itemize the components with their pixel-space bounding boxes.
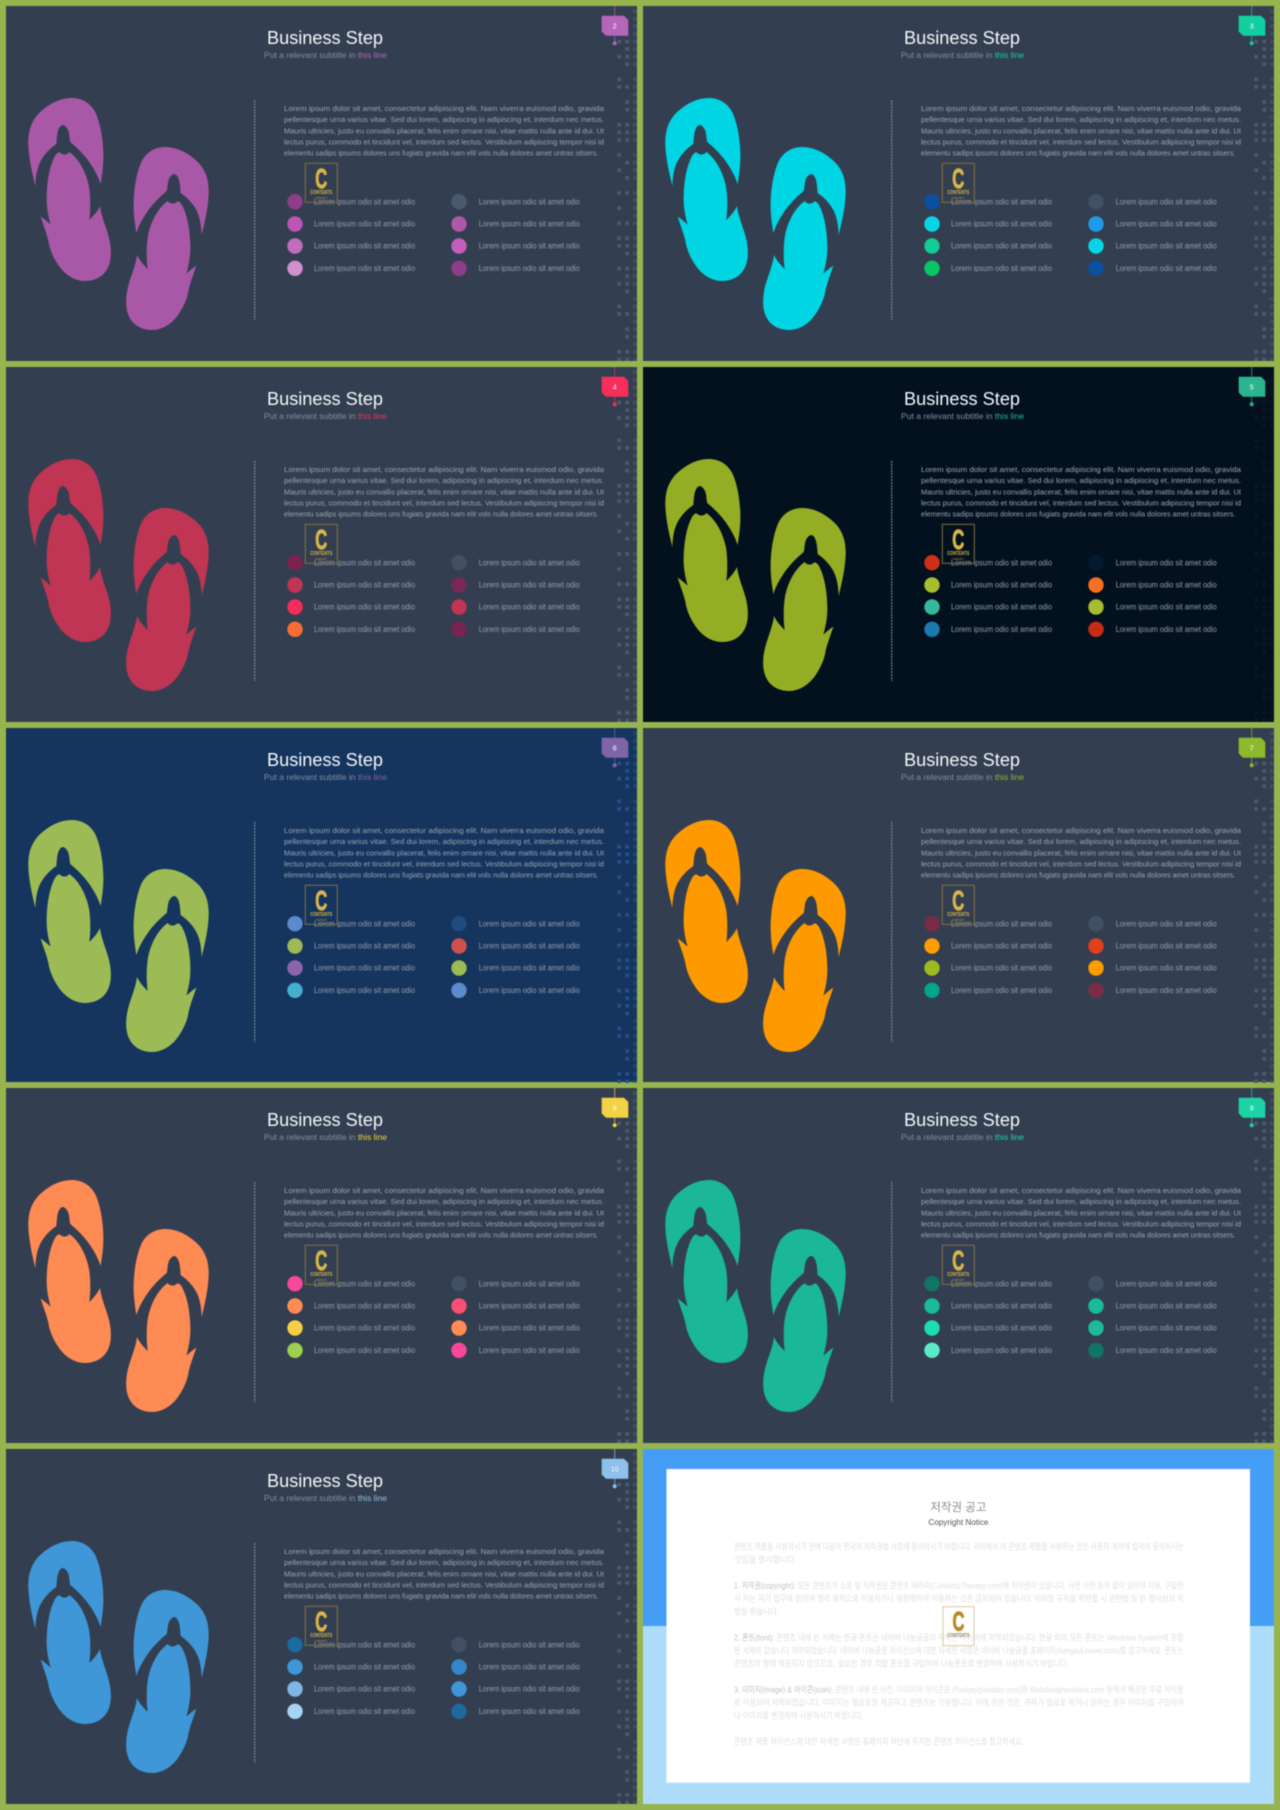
notice section 1: 사 자는 자기 업무에 한하여 영리 목적으로 이용하거나 재판매하여 이용하는 것은 금지되어 있습니다. 이러한 규칙을 위반할 시 관련법 및 민·형사상의 처 [734, 1592, 1184, 1603]
text block: paragraph: Mauris ultricies, justo eu convallis placerat, felis enim ornare nisi, vitae mattis nulla ante id dui. Ut [921, 848, 1241, 857]
legend list: Lorem ipsum odio sit amet odio [314, 242, 416, 251]
icon: flip flops [28, 1541, 209, 1773]
legend list: Lorem ipsum odio sit amet odio [314, 625, 416, 634]
page tab: 3 [1250, 24, 1254, 30]
panel: slide 7 orange [643, 728, 1274, 1083]
legend list: Lorem ipsum odio sit amet odio [951, 1279, 1053, 1288]
text block: paragraph: Mauris ultricies, justo eu convallis placerat, felis enim ornare nisi, vitae mattis nulla ante id dui. Ut [921, 487, 1241, 496]
legend list: Lorem ipsum odio sit amet odio [951, 197, 1053, 206]
logo: C [315, 1606, 327, 1637]
notice section 3: 로 이용되어 저작되었습니다. 이미지는 필요로한 제공하고 콘텐츠는 기본합니다. 이에 관한 것은, 귀하가 필요로 하거나 원하는 경우 이미지를 구입하여 [734, 1696, 1184, 1707]
legend list: Lorem ipsum odio sit amet odio [314, 1707, 416, 1716]
icon: flip flops [665, 98, 846, 330]
panel: slide 4 crimson [6, 367, 637, 722]
notice section 2: 2. 폰트(font): 콘텐츠 내에 쓴 서체는 한글 폰트는 네이버 나눔글꼴의 저작권 네이버에 저작되었습니다. 한글 외의 모든 폰트는 Windows System에 포함 [734, 1631, 1184, 1642]
logo: CONTENTS [310, 190, 333, 196]
legend list [287, 1637, 580, 1719]
text block: paragraph: Mauris ultricies, justo eu convallis placerat, felis enim ornare nisi, vitae mattis nulla ante id dui. Ut [921, 1208, 1241, 1217]
legend list: Lorem ipsum odio sit amet odio [951, 1346, 1053, 1355]
logo [305, 1606, 337, 1645]
logo: CONTENTS [310, 551, 333, 557]
panel: slide 6 green on blue [6, 728, 637, 1083]
logo: C [315, 885, 327, 916]
text block: paragraph [921, 1186, 1242, 1240]
legend list: Lorem ipsum odio sit amet odio [479, 558, 580, 567]
subtitle: Put a relevant subtitle in this line [901, 412, 1024, 421]
legend list: Lorem ipsum odio sit amet odio [314, 986, 416, 995]
text block: paragraph: elementu sadips ipsums dolores uns fugiats gravida nam elit vols nulla dolores amet untras sitsers. [284, 510, 598, 518]
notice section 2 [734, 1631, 1184, 1668]
legend list: Lorem ipsum odio sit amet odio [1116, 942, 1217, 951]
logo: THERAPY [315, 196, 327, 200]
text block: paragraph [284, 826, 605, 880]
legend list: Lorem ipsum odio sit amet odio [951, 1302, 1053, 1311]
legend list: Lorem ipsum odio sit amet odio [479, 1707, 580, 1716]
legend list: Lorem ipsum odio sit amet odio [479, 986, 580, 995]
legend list: Lorem ipsum odio sit amet odio [951, 986, 1053, 995]
page tab: 5 [1250, 384, 1254, 392]
legend list: Lorem ipsum odio sit amet odio [951, 264, 1053, 273]
legend list: Lorem ipsum odio sit amet odio [479, 1640, 580, 1649]
notice intro: 것임을 명시합니다. [734, 1553, 797, 1564]
icon: flip flops [28, 98, 209, 330]
legend list: Lorem ipsum odio sit amet odio [314, 220, 416, 229]
text block: paragraph: pellentesque urna varius vitae. Sed dui lorem, adipiscing in adipiscing et, interdum nec metus. [284, 1197, 604, 1206]
legend list [287, 194, 580, 276]
logo [305, 1245, 337, 1284]
page tab: 4 [613, 384, 617, 392]
legend list [924, 555, 1217, 637]
subtitle: Put a relevant subtitle in this line [901, 1133, 1024, 1142]
text block: paragraph: Lorem ipsum dolor sit amet, consectetur adipiscing elit. Nam viverra euismod odio, gravida [921, 104, 1242, 113]
legend list: Lorem ipsum odio sit amet odio [314, 1685, 416, 1694]
notice section 2: 된 서체와 같습니다 저작되었습니다. 네이버 나눔글꼴 라이선스에 대한 자세한 사항은 네이버 나눔글꼴 홈페이지(hangeul.naver.com)를 참고하세요. 폰트는 [734, 1645, 1184, 1656]
legend list [287, 916, 580, 998]
text block: paragraph [284, 465, 605, 518]
legend list [287, 555, 580, 637]
panel: slide 5 olive on navy [643, 367, 1274, 722]
legend list: Lorem ipsum odio sit amet odio [951, 603, 1053, 612]
text block: paragraph [921, 826, 1242, 880]
text block: paragraph: lectus purus, commodo et tincidunt vel, interdum sed lectus. Vestibulum adipiscing tempor nisi id [284, 1219, 604, 1228]
subtitle: Put a relevant subtitle in this line [264, 412, 387, 421]
logo: CONTENTS [948, 1633, 970, 1639]
legend list: Lorem ipsum odio sit amet odio [479, 1346, 580, 1355]
notice section 1: 1. 저작권(copyright): 모든 콘텐츠의 소유 및 저작권은 콘텐츠 테라피(ContentsTherapy.com)에 저작권이 있습니다. 사전 서면 동의 없이 임의적 이용, 구입한 [734, 1580, 1184, 1591]
legend list: Lorem ipsum odio sit amet odio [479, 264, 580, 273]
legend list: Lorem ipsum odio sit amet odio [479, 603, 580, 612]
legend list: Lorem ipsum odio sit amet odio [951, 242, 1053, 251]
text block: paragraph: Mauris ultricies, justo eu convallis placerat, felis enim ornare nisi, vitae mattis nulla ante id dui. Ut [284, 848, 604, 857]
logo: THERAPY [952, 918, 964, 922]
logo: THERAPY [952, 557, 964, 561]
heading: Business Step [904, 1109, 1020, 1130]
legend list: Lorem ipsum odio sit amet odio [1116, 986, 1217, 995]
page tab: 7 [1250, 746, 1254, 752]
logo [305, 524, 337, 563]
legend list: Lorem ipsum odio sit amet odio [314, 1640, 416, 1649]
icon: flip flops [28, 820, 209, 1052]
white notice card [666, 1469, 1250, 1783]
icon: flip flops [665, 820, 846, 1052]
logo: CONTENTS [310, 1633, 333, 1639]
text block: paragraph: Mauris ultricies, justo eu convallis placerat, felis enim ornare nisi, vitae mattis nulla ante id dui. Ut [284, 126, 604, 135]
logo: CONTENTS [947, 1272, 970, 1278]
legend list: Lorem ipsum odio sit amet odio [479, 1663, 580, 1672]
legend list: Lorem ipsum odio sit amet odio [314, 1663, 416, 1672]
logo: THERAPY [952, 1278, 964, 1282]
text block: paragraph: elementu sadips ipsums dolores uns fugiats gravida nam elit vols nulla dolores amet untras sitsers. [921, 510, 1235, 518]
page tab [1239, 6, 1265, 45]
legend list: Lorem ipsum odio sit amet odio [479, 197, 580, 206]
legend list: Lorem ipsum odio sit amet odio [1116, 220, 1217, 229]
text block: paragraph: elementu sadips ipsums dolores uns fugiats gravida nam elit vols nulla dolores amet untras sitsers. [921, 870, 1235, 880]
logo [305, 163, 337, 202]
logo: CONTENTS [310, 1272, 333, 1278]
legend list: Lorem ipsum odio sit amet odio [1116, 264, 1217, 273]
text block: paragraph: elementu sadips ipsums dolores uns fugiats gravida nam elit vols nulla dolores amet untras sitsers. [284, 870, 598, 880]
heading: Business Step [904, 749, 1020, 770]
page tab [1239, 728, 1265, 767]
page tab [602, 728, 628, 767]
legend list: Lorem ipsum odio sit amet odio [479, 942, 580, 951]
text block: paragraph: Mauris ultricies, justo eu convallis placerat, felis enim ornare nisi, vitae mattis nulla ante id dui. Ut [284, 487, 604, 496]
logo: CONTENTS [947, 190, 970, 196]
logo [942, 1245, 974, 1284]
legend list: Lorem ipsum odio sit amet odio [1116, 242, 1217, 251]
logo: C [952, 885, 964, 916]
legend list: Lorem ipsum odio sit amet odio [314, 1302, 416, 1311]
panel: slide 3 cyan [643, 6, 1274, 361]
legend list [924, 1276, 1217, 1358]
panel: slide 9 teal [643, 1088, 1274, 1443]
legend list: Lorem ipsum odio sit amet odio [314, 558, 416, 567]
legend list: Lorem ipsum odio sit amet odio [479, 625, 580, 634]
logo [943, 1606, 974, 1646]
text block: paragraph: Lorem ipsum dolor sit amet, consectetur adipiscing elit. Nam viverra euismod odio, gravida [921, 1186, 1242, 1195]
legend list: Lorem ipsum odio sit amet odio [479, 581, 580, 590]
legend list: Lorem ipsum odio sit amet odio [314, 1279, 416, 1288]
legend list: Lorem ipsum odio sit amet odio [479, 242, 580, 251]
legend list: Lorem ipsum odio sit amet odio [1116, 1302, 1217, 1311]
text block: paragraph [921, 465, 1242, 518]
notice section 3 [734, 1683, 1184, 1720]
text block: paragraph: elementu sadips ipsums dolores uns fugiats gravida nam elit vols nulla dolores amet untras sitsers. [284, 1592, 598, 1600]
text block: paragraph: pellentesque urna varius vitae. Sed dui lorem, adipiscing in adipiscing et, interdum nec metus. [921, 476, 1241, 485]
logo [305, 885, 337, 924]
page tab: 8 [613, 1106, 617, 1112]
text block: paragraph: elementu sadips ipsums dolores uns fugiats gravida nam elit vols nulla dolores amet untras sitsers. [284, 148, 598, 158]
text block: paragraph: Lorem ipsum dolor sit amet, consectetur adipiscing elit. Nam viverra euismod odio, gravida [284, 104, 605, 113]
notice section 3: 3. 이미지(image) & 아이콘(icon): 콘텐츠 내에 쓴 사진, 이미지와 아이콘은 Pixabay(pixabay.com)와 Webdesignerdepot.com 등에서 제공된 무료 저작물 [734, 1683, 1184, 1694]
page tab: 10 [611, 1466, 619, 1474]
text block: paragraph: elementu sadips ipsums dolores uns fugiats gravida nam elit vols nulla dolores amet untras sitsers. [921, 1230, 1235, 1240]
logo [942, 163, 974, 202]
logo: CONTENTS [947, 551, 970, 557]
text block: paragraph: lectus purus, commodo et tincidunt vel, interdum sed lectus. Vestibulum adipiscing tempor nisi id [921, 859, 1241, 868]
logo: THERAPY [315, 918, 327, 922]
legend list: Lorem ipsum odio sit amet odio [479, 1302, 580, 1311]
page tab: 6 [613, 746, 617, 752]
notice footer line: 콘텐츠 제품 라이선스에 대한 자세한 사항은 홈페이지 하단에 위치한 콘텐츠 라이선스를 참고하세요. [734, 1736, 1024, 1747]
panel: slide 8 coral [6, 1088, 637, 1443]
legend list: Lorem ipsum odio sit amet odio [314, 1324, 416, 1333]
subtitle: Put a relevant subtitle in this line [264, 773, 387, 782]
text block: paragraph: pellentesque urna varius vitae. Sed dui lorem, adipiscing in adipiscing et, interdum nec metus. [284, 837, 604, 846]
legend list: Lorem ipsum odio sit amet odio [1116, 625, 1217, 634]
logo [942, 885, 974, 924]
text block: paragraph: Mauris ultricies, justo eu convallis placerat, felis enim ornare nisi, vitae mattis nulla ante id dui. Ut [921, 126, 1241, 135]
logo: THERAPY [315, 1639, 327, 1643]
page tab [1239, 367, 1265, 406]
legend list: Lorem ipsum odio sit amet odio [1116, 197, 1217, 206]
legend list [924, 916, 1217, 998]
text block: paragraph: Lorem ipsum dolor sit amet, consectetur adipiscing elit. Nam viverra euismod odio, gravida [284, 1186, 605, 1195]
legend list: Lorem ipsum odio sit amet odio [314, 581, 416, 590]
legend list: Lorem ipsum odio sit amet odio [314, 964, 416, 973]
logo: THERAPY [952, 196, 964, 200]
legend list: Lorem ipsum odio sit amet odio [951, 964, 1053, 973]
notice title: 저작권 공고 [930, 1501, 986, 1514]
text block: paragraph [284, 104, 605, 158]
legend list: Lorem ipsum odio sit amet odio [314, 1346, 416, 1355]
subtitle: Put a relevant subtitle in this line [901, 773, 1024, 782]
text block: paragraph: lectus purus, commodo et tincidunt vel, interdum sed lectus. Vestibulum adipiscing tempor nisi id [921, 137, 1241, 146]
text block: paragraph [921, 104, 1242, 158]
text block: paragraph: Mauris ultricies, justo eu convallis placerat, felis enim ornare nisi, vitae mattis nulla ante id dui. Ut [284, 1208, 604, 1217]
page tab [602, 6, 628, 45]
notice section 2: 콘텐츠의 형태 제공되지 않으므로, 필요한 경우 적합 폰트를 구입하여 나눔폰트로 변경하여 사용하시기 바랍니다. [734, 1657, 1069, 1668]
text block: paragraph [284, 1547, 605, 1600]
legend list: Lorem ipsum odio sit amet odio [1116, 581, 1217, 590]
legend list: Lorem ipsum odio sit amet odio [951, 919, 1053, 928]
text block: paragraph: pellentesque urna varius vitae. Sed dui lorem, adipiscing in adipiscing et, interdum nec metus. [284, 115, 604, 124]
notice section 1 [734, 1580, 1184, 1617]
legend list: Lorem ipsum odio sit amet odio [1116, 1279, 1217, 1288]
legend list: Lorem ipsum odio sit amet odio [479, 1324, 580, 1333]
panel: copyright notice [643, 1449, 1274, 1804]
legend list [287, 1276, 580, 1358]
text block: paragraph: Lorem ipsum dolor sit amet, consectetur adipiscing elit. Nam viverra euismod odio, gravida [921, 465, 1242, 474]
text block: paragraph: Lorem ipsum dolor sit amet, consectetur adipiscing elit. Nam viverra euismod odio, gravida [284, 1547, 605, 1556]
page tab: 9 [1250, 1106, 1254, 1112]
legend list: Lorem ipsum odio sit amet odio [951, 558, 1053, 567]
logo: C [315, 524, 327, 555]
text block: paragraph: elementu sadips ipsums dolores uns fugiats gravida nam elit vols nulla dolores amet untras sitsers. [284, 1230, 598, 1240]
page tab [602, 1088, 628, 1127]
legend list: Lorem ipsum odio sit amet odio [314, 264, 416, 273]
icon: flip flops [28, 1180, 209, 1412]
notice intro [734, 1541, 1184, 1564]
subtitle: Put a relevant subtitle in this line [901, 51, 1024, 60]
subtitle: Put a relevant subtitle in this line [264, 1133, 387, 1142]
text block: paragraph: lectus purus, commodo et tincidunt vel, interdum sed lectus. Vestibulum adipiscing tempor nisi id [284, 137, 604, 146]
notice subtitle: Copyright Notice [928, 1517, 989, 1527]
logo [942, 524, 974, 563]
notice section 3: 나 이미지를 변경하여 사용하시기 바랍니다. [734, 1709, 863, 1720]
subtitle: Put a relevant subtitle in this line [264, 51, 387, 60]
legend list: Lorem ipsum odio sit amet odio [479, 1685, 580, 1694]
heading: Business Step [267, 27, 383, 48]
logo: C [952, 1606, 964, 1636]
text block: paragraph: lectus purus, commodo et tincidunt vel, interdum sed lectus. Vestibulum adipiscing tempor nisi id [284, 859, 604, 868]
legend list: Lorem ipsum odio sit amet odio [1116, 558, 1217, 567]
notice section 1: 벌을 받습니다. [734, 1607, 779, 1617]
text block: paragraph: pellentesque urna varius vitae. Sed dui lorem, adipiscing in adipiscing et, interdum nec metus. [284, 1558, 604, 1567]
panel: slide 10 blue [6, 1449, 637, 1804]
heading: Business Step [267, 1470, 383, 1491]
legend list: Lorem ipsum odio sit amet odio [314, 919, 416, 928]
text block: paragraph: pellentesque urna varius vitae. Sed dui lorem, adipiscing in adipiscing et, interdum nec metus. [921, 837, 1241, 846]
panel: slide 2 purple [6, 6, 637, 361]
page tab [1239, 1088, 1265, 1127]
legend list: Lorem ipsum odio sit amet odio [1116, 919, 1217, 928]
text block: paragraph: lectus purus, commodo et tincidunt vel, interdum sed lectus. Vestibulum adipiscing tempor nisi id [921, 498, 1241, 507]
text block: paragraph: pellentesque urna varius vitae. Sed dui lorem, adipiscing in adipiscing et, interdum nec metus. [921, 1197, 1241, 1206]
page tab: 2 [613, 24, 617, 30]
legend list: Lorem ipsum odio sit amet odio [479, 964, 580, 973]
text block: paragraph: elementu sadips ipsums dolores uns fugiats gravida nam elit vols nulla dolores amet untras sitsers. [921, 148, 1235, 158]
legend list: Lorem ipsum odio sit amet odio [1116, 964, 1217, 973]
legend list: Lorem ipsum odio sit amet odio [479, 1279, 580, 1288]
text block: paragraph: pellentesque urna varius vitae. Sed dui lorem, adipiscing in adipiscing et, interdum nec metus. [921, 115, 1241, 124]
heading: Business Step [267, 749, 383, 770]
legend list: Lorem ipsum odio sit amet odio [951, 581, 1053, 590]
logo: C [952, 524, 964, 555]
heading: Business Step [904, 27, 1020, 48]
logo: C [952, 163, 964, 194]
legend list: Lorem ipsum odio sit amet odio [314, 942, 416, 951]
legend list: Lorem ipsum odio sit amet odio [1116, 1324, 1217, 1333]
text block: paragraph: Lorem ipsum dolor sit amet, consectetur adipiscing elit. Nam viverra euismod odio, gravida [921, 826, 1242, 835]
text block: paragraph: Lorem ipsum dolor sit amet, consectetur adipiscing elit. Nam viverra euismod odio, gravida [284, 465, 605, 474]
logo: CONTENTS [947, 912, 970, 918]
logo: THERAPY [315, 557, 327, 561]
legend list [924, 194, 1217, 276]
icon: flip flops [28, 459, 209, 691]
text block: paragraph: lectus purus, commodo et tincidunt vel, interdum sed lectus. Vestibulum adipiscing tempor nisi id [284, 1580, 604, 1589]
legend list: Lorem ipsum odio sit amet odio [479, 220, 580, 229]
page tab [602, 367, 628, 406]
text block: paragraph: pellentesque urna varius vitae. Sed dui lorem, adipiscing in adipiscing et, interdum nec metus. [284, 476, 604, 485]
legend list: Lorem ipsum odio sit amet odio [314, 197, 416, 206]
legend list: Lorem ipsum odio sit amet odio [479, 919, 580, 928]
heading: Business Step [904, 388, 1020, 409]
legend list: Lorem ipsum odio sit amet odio [314, 603, 416, 612]
text block: paragraph: Lorem ipsum dolor sit amet, consectetur adipiscing elit. Nam viverra euismod odio, gravida [284, 826, 605, 835]
legend list: Lorem ipsum odio sit amet odio [951, 220, 1053, 229]
logo: C [315, 1245, 327, 1276]
text block: paragraph: Mauris ultricies, justo eu convallis placerat, felis enim ornare nisi, vitae mattis nulla ante id dui. Ut [284, 1569, 604, 1578]
legend list: Lorem ipsum odio sit amet odio [1116, 603, 1217, 612]
icon: flip flops [665, 1180, 846, 1412]
logo: CONTENTS [310, 912, 333, 918]
heading: Business Step [267, 1109, 383, 1130]
text block: paragraph: lectus purus, commodo et tincidunt vel, interdum sed lectus. Vestibulum adipiscing tempor nisi id [921, 1219, 1241, 1228]
heading: Business Step [267, 388, 383, 409]
logo: THERAPY [315, 1278, 327, 1282]
subtitle: Put a relevant subtitle in this line [264, 1494, 387, 1503]
legend list: Lorem ipsum odio sit amet odio [951, 942, 1053, 951]
legend list: Lorem ipsum odio sit amet odio [1116, 1346, 1217, 1355]
icon: flip flops [665, 459, 846, 691]
page tab [602, 1449, 628, 1488]
logo: C [952, 1245, 964, 1276]
text block: paragraph: lectus purus, commodo et tincidunt vel, interdum sed lectus. Vestibulum adipiscing tempor nisi id [284, 498, 604, 507]
legend list: Lorem ipsum odio sit amet odio [951, 625, 1053, 634]
logo: C [315, 163, 327, 194]
legend list: Lorem ipsum odio sit amet odio [951, 1324, 1053, 1333]
text block: paragraph [284, 1186, 605, 1240]
